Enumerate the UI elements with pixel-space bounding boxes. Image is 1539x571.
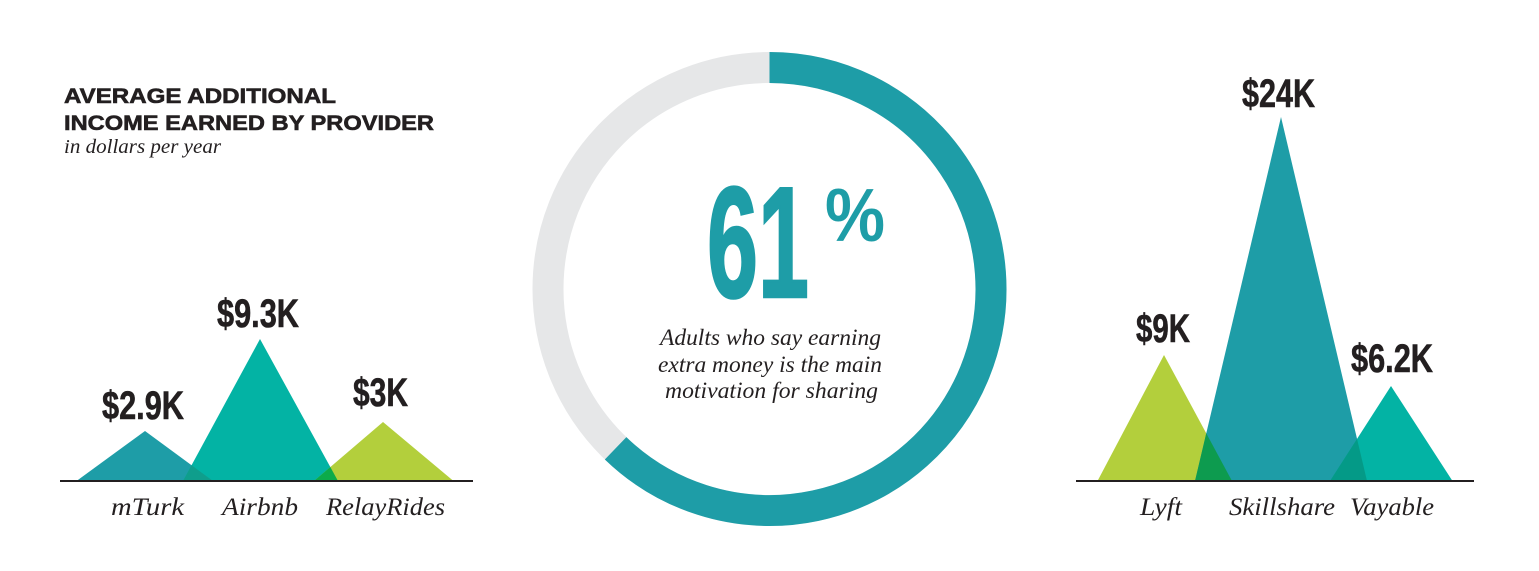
percent sign: % <box>825 173 885 257</box>
axis: right baseline <box>1076 480 1474 482</box>
ring: remainder <box>548 68 991 510</box>
label: RelayRides: RelayRides <box>325 494 445 521</box>
caption: motivation for sharing <box>665 378 878 403</box>
caption: extra money is the main <box>658 352 882 377</box>
triangle: mTurk <box>76 431 213 481</box>
value: mTurk: $2.9K <box>102 384 184 428</box>
axis: left baseline <box>60 480 473 482</box>
triangle: RelayRides <box>314 422 454 481</box>
heading: average additional income: in dollars per year <box>64 136 221 158</box>
triangle: Airbnb <box>183 339 338 481</box>
value: Airbnb: $9.3K <box>217 292 299 336</box>
chart: left providers <box>60 292 473 521</box>
label: Vayable: Vayable <box>1350 494 1434 521</box>
overlap: Airbnb and RelayRides <box>315 467 338 480</box>
label: Airbnb: Airbnb <box>220 494 298 521</box>
caption <box>658 325 882 403</box>
value: Vayable: $6.2K <box>1351 337 1433 381</box>
label: Lyft: Lyft <box>1139 494 1183 521</box>
triangle: Lyft <box>1098 355 1232 481</box>
donut chart: 61 percent <box>548 67 991 510</box>
overlap: Skillshare and Vayable <box>1330 439 1367 480</box>
heading: average additional income: AVERAGE ADDITIONAL <box>64 85 336 108</box>
triangle: Vayable <box>1330 386 1452 481</box>
label: Skillshare: Skillshare <box>1229 494 1335 521</box>
big number: 61 <box>707 155 809 331</box>
overlap: Lyft and Skillshare <box>1195 433 1232 480</box>
heading: average additional income <box>64 85 434 158</box>
triangle: Skillshare <box>1195 117 1367 481</box>
caption: Adults who say earning <box>658 325 881 350</box>
value: Skillshare: $24K <box>1242 72 1315 116</box>
value: RelayRides: $3K <box>353 371 408 415</box>
overlap: mTurk and Airbnb <box>184 466 212 480</box>
infographic canvas <box>60 52 1474 526</box>
heading: average additional income: INCOME EARNED BY PROVIDER <box>64 112 434 135</box>
chart: right providers <box>1076 72 1474 521</box>
label: mTurk: mTurk <box>111 494 185 521</box>
ring: 61 percent arc <box>616 67 991 510</box>
value: Lyft: $9K <box>1136 307 1190 351</box>
